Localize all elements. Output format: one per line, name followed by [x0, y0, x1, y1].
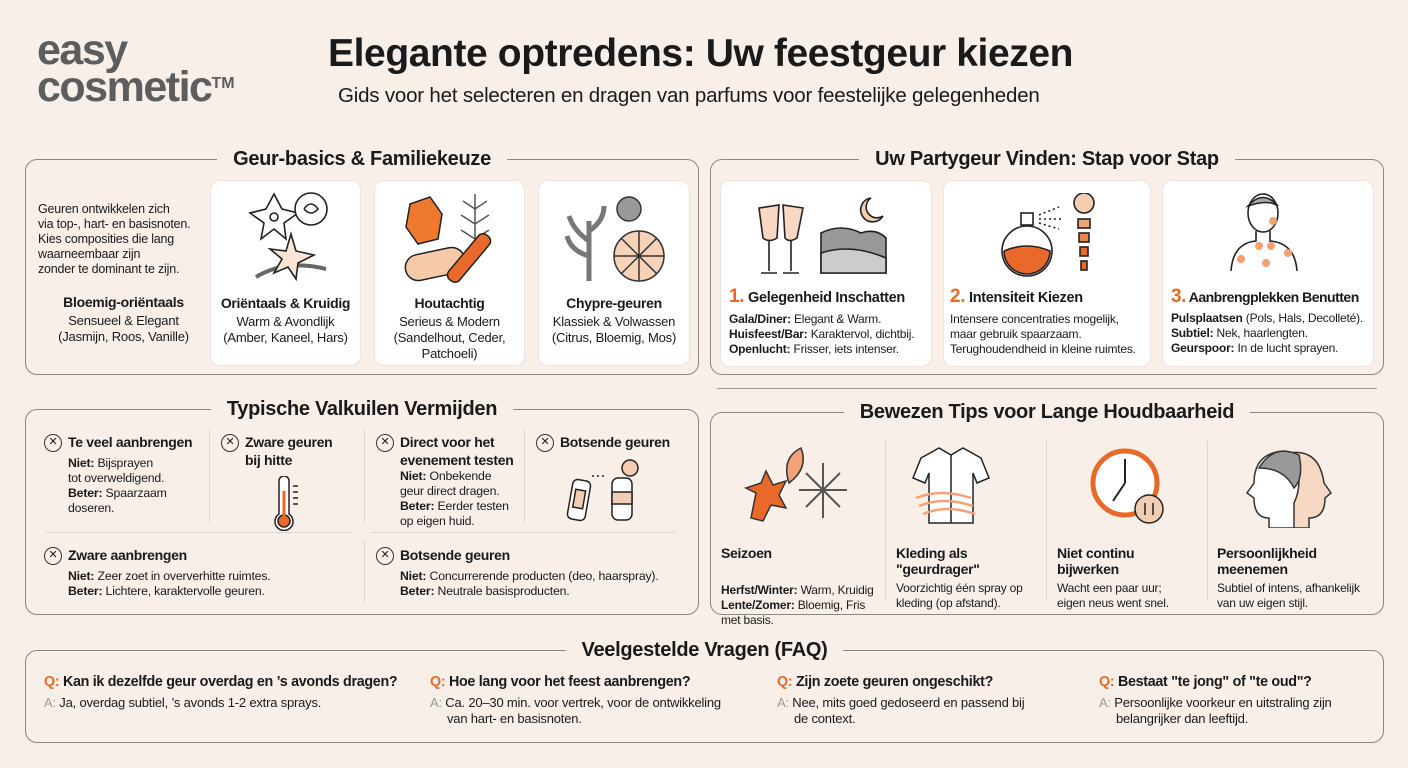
family: bloemig: Sensueel & Elegant [68, 313, 179, 328]
tip: seizoen: Herfst/Winter: Warm, Kruidig [721, 583, 874, 597]
panel: tips [710, 412, 1384, 615]
faq 2: Q: Hoe lang voor het feest aanbrengen? [430, 674, 690, 690]
tip: seizoen: met basis. [721, 613, 774, 627]
tip: niet bijwerken: Wacht een paar uur; [1057, 581, 1161, 595]
faq 4: A: Persoonlijke voorkeur en uitstraling zijn [1099, 695, 1332, 710]
icon: leaves snowflake [744, 447, 847, 522]
icon: thermometer [274, 476, 298, 531]
icon: two heads [1246, 450, 1332, 528]
icon: glasses night [758, 197, 887, 274]
card: oriëntaals: (Amber, Kaneel, Hars) [223, 330, 348, 345]
icon: shirt [912, 447, 990, 524]
faq 3: A: Nee, mits goed gedoseerd en passend bij [777, 695, 1024, 710]
card: houtachtig: (Sandelhout, Ceder, [394, 330, 505, 345]
card: chypre: (Citrus, Bloemig, Mos) [552, 330, 676, 345]
pitfall 5 [44, 547, 270, 598]
icon: body pulse points [1230, 193, 1298, 271]
logo: easy [37, 26, 127, 74]
tip: kleding [896, 447, 1023, 610]
tip: niet bijwerken: eigen neus went snel. [1057, 596, 1169, 610]
pitfall 3: Beter: Eerder testen [400, 499, 509, 513]
pitfall 6: Beter: Neutrale basisproducten. [400, 584, 569, 598]
card: houtachtig [374, 180, 525, 366]
pitfall 6: Botsende geuren [400, 547, 510, 563]
panel: stap voor stap: Uw Partygeur Vinden: Stap voor Stap [875, 148, 1219, 170]
faq 4: Q: Bestaat "te jong" of "te oud"? [1099, 674, 1312, 690]
logo [37, 26, 235, 111]
pitfall 1: Te veel aanbrengen [68, 434, 192, 450]
pitfall 4: ✕ [541, 436, 549, 448]
step 1: Openlucht: Frisser, iets intenser. [729, 342, 899, 356]
card: chypre: Chypre-geuren [566, 295, 662, 311]
pitfall 5: Niet: Zeer zoet in oververhitte ruimtes. [68, 569, 270, 583]
step 3 [1162, 180, 1374, 367]
step 2: Terughoudendheid in kleine ruimtes. [950, 342, 1136, 356]
pitfall 3: Niet: Onbekende [400, 469, 491, 483]
pitfall 1: ✕ [49, 436, 57, 448]
pitfall 3: op eigen huid. [400, 514, 474, 528]
tip: seizoen: Seizoen [721, 545, 772, 561]
panel: tips: Bewezen Tips voor Lange Houdbaarheid [860, 401, 1234, 423]
pitfall 3: geur direct dragen. [400, 484, 499, 498]
tip: seizoen: Lente/Zomer: Bloemig, Fris [721, 598, 865, 612]
step 3: Subtiel: Nek, haarlengten. [1171, 326, 1308, 340]
card: oriëntaals: Warm & Avondlijk [237, 314, 334, 329]
pitfall 6 [376, 547, 659, 598]
step 1: Gala/Diner: Elegant & Warm. [729, 312, 881, 326]
icon: sprays [566, 459, 639, 522]
faq 4: belangrijker dan leeftijd. [1116, 711, 1248, 726]
pitfall 1: Niet: Bijsprayen [68, 456, 153, 470]
pitfall 1: tot overweldigend. [68, 471, 164, 485]
step 3: 3. Aanbrengplekken Benutten [1171, 286, 1359, 307]
pitfall 2 [221, 434, 332, 531]
panel: FAQ [25, 650, 1384, 743]
pitfall 1 [44, 434, 192, 515]
step 2: 2. Intensiteit Kiezen [950, 286, 1083, 307]
tip: niet bijwerken [1057, 448, 1169, 610]
pitfall 1: Beter: Spaarzaam [68, 486, 167, 500]
icon: clock pause [1090, 448, 1164, 524]
pitfall 3: Direct voor het [400, 434, 494, 450]
pitfall 4: Botsende geuren [560, 434, 670, 450]
tip: persoonlijkheid [1217, 450, 1360, 610]
tip: persoonlijkheid: van uw eigen stijl. [1217, 596, 1308, 610]
faq 3 [777, 674, 1024, 726]
panel: stap voor stap [710, 159, 1384, 375]
pitfall 2: Zware geuren [245, 434, 332, 450]
faq 1 [44, 674, 397, 710]
tip: persoonlijkheid: meenemen [1217, 561, 1288, 577]
family: bloemig [58, 294, 189, 344]
card: houtachtig: Patchoeli) [422, 346, 477, 361]
pitfall 3: evenement testen [400, 452, 513, 468]
icon: perfume bottle [1001, 193, 1095, 277]
pitfall 1: doseren. [68, 501, 114, 515]
family: bloemig: Bloemig-oriëntaals [63, 294, 184, 310]
icon: wood [404, 194, 492, 283]
card: houtachtig: Serieus & Modern [399, 314, 500, 329]
faq 3: Q: Zijn zoete geuren ongeschikt? [777, 674, 993, 690]
step 2: maar gebruik spaarzaam. [950, 327, 1081, 341]
panel: valkuilen [25, 409, 699, 615]
tip: kleding: "geurdrager" [896, 561, 980, 577]
intro text: zonder te dominant te zijn. [38, 262, 179, 276]
faq 2 [430, 674, 721, 726]
title: Elegante optredens: Uw feestgeur kiezen [328, 32, 1073, 75]
step 1: Huisfeest/Bar: Karaktervol, dichtbij. [729, 327, 914, 341]
faq 1: A: Ja, overdag subtiel, ’s avonds 1-2 extra sprays. [44, 695, 321, 710]
pitfall 2: bij hitte [245, 452, 292, 468]
tip: persoonlijkheid: Persoonlijkheid [1217, 545, 1317, 561]
logo: cosmeticTM [37, 63, 235, 111]
intro text [38, 202, 190, 276]
step 2 [943, 180, 1151, 367]
tip: niet bijwerken: Niet continu [1057, 545, 1134, 561]
intro text: waarneembaar zijn [38, 247, 140, 261]
faq 3: de context. [794, 711, 855, 726]
panel: geur-basics: Geur-basics & Familiekeuze [233, 148, 491, 170]
card: chypre: Klassiek & Volwassen [553, 314, 675, 329]
faq 2: van hart- en basisnoten. [447, 711, 582, 726]
tip: niet bijwerken: bijwerken [1057, 561, 1119, 577]
intro text: via top-, hart- en basisnoten. [38, 217, 190, 231]
pitfall 6: Niet: Concurrerende producten (deo, haarspray). [400, 569, 659, 583]
panel: geur-basics [25, 159, 699, 375]
tip: seizoen [721, 447, 874, 627]
subtitle: Gids voor het selecteren en dragen van parfums voor feestelijke gelegenheden [338, 84, 1040, 107]
tip: kleding: Voorzichtig één spray op [896, 581, 1023, 595]
step 3: Pulsplaatsen (Pols, Hals, Decolleté). [1171, 311, 1363, 325]
faq 4 [1099, 674, 1332, 726]
icon: flowers [248, 192, 328, 282]
tip: kleding: Kleding als [896, 545, 967, 561]
card: oriëntaals: Oriëntaals & Kruidig [221, 295, 350, 311]
panel: valkuilen: Typische Valkuilen Vermijden [227, 398, 497, 420]
pitfall 5: Beter: Lichtere, karaktervolle geuren. [68, 584, 265, 598]
panel: FAQ: Veelgestelde Vragen (FAQ) [582, 639, 827, 661]
pitfall 2: ✕ [226, 436, 234, 448]
faq 2: A: Ca. 20–30 min. voor vertrek, voor de ontwikkeling [430, 695, 721, 710]
pitfall 5: Zware aanbrengen [68, 547, 187, 563]
intro text: Kies composities die lang [38, 232, 174, 246]
icon: moss citrus [564, 196, 665, 282]
step 3: Geurspoor: In de lucht sprayen. [1171, 341, 1338, 355]
pitfall 3: ✕ [381, 436, 389, 448]
card: houtachtig: Houtachtig [414, 295, 485, 311]
pitfall 5: ✕ [49, 549, 57, 561]
tip: kleding: kleding (op afstand). [896, 596, 1001, 610]
tip: persoonlijkheid: Subtiel of intens, afhankelijk [1217, 581, 1360, 595]
step 1 [720, 180, 932, 367]
intro text: Geuren ontwikkelen zich [38, 202, 170, 216]
pitfall 3 [376, 434, 513, 528]
faq 1: Q: Kan ik dezelfde geur overdag en ’s avonds dragen? [44, 674, 397, 690]
card: chypre [538, 180, 690, 366]
pitfall 6: ✕ [381, 549, 389, 561]
step 1: 1. Gelegenheid Inschatten [729, 286, 905, 307]
card: oriëntaals [210, 180, 361, 366]
step 2: Intensere concentraties mogelijk, [950, 312, 1119, 326]
family: bloemig: (Jasmijn, Roos, Vanille) [58, 329, 189, 344]
pitfall 4 [536, 434, 670, 522]
